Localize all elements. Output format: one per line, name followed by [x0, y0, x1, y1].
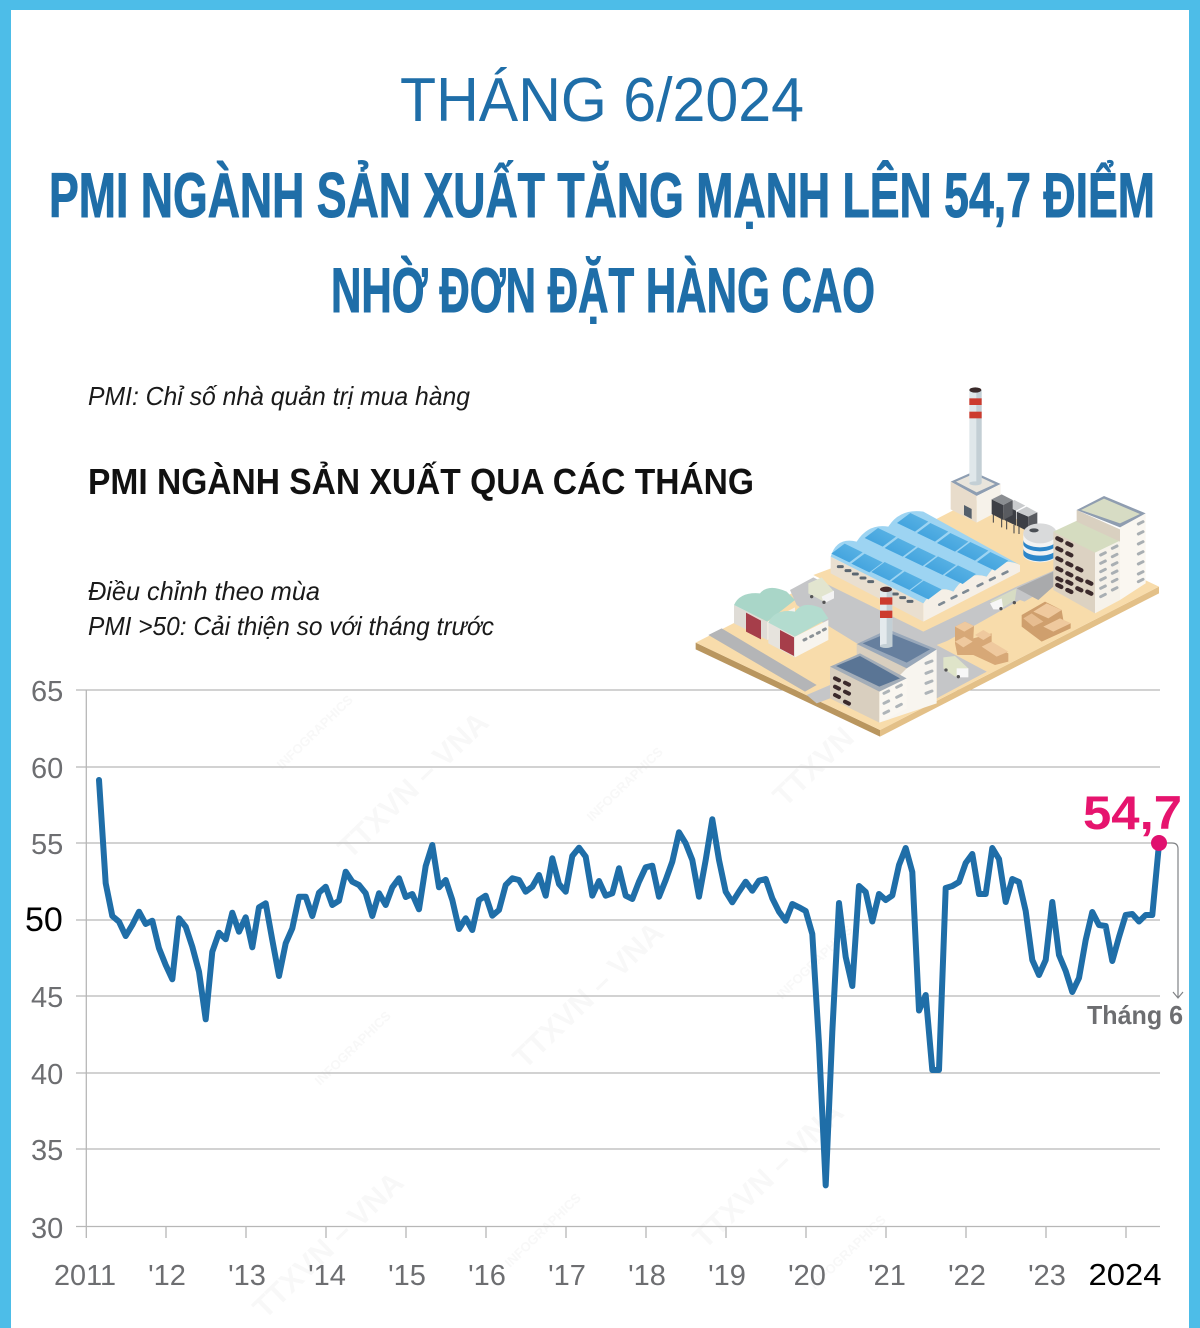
main warehouse — [813, 511, 1033, 630]
x axis labels: '22 — [948, 1260, 986, 1292]
title block: NHỜ ĐƠN ĐẶT HÀNG CAO — [331, 256, 875, 326]
y axis labels: 60 — [31, 753, 63, 785]
callout value: 54,7 — [1083, 786, 1182, 839]
PMI definition note: PMI: Chỉ số nhà quản trị mua hàng — [88, 381, 471, 411]
x axis labels: '20 — [788, 1260, 826, 1292]
y axis labels: 45 — [31, 982, 63, 1014]
x axis labels: 2024 — [1088, 1257, 1162, 1292]
cooling units — [992, 494, 1037, 534]
y axis labels — [25, 676, 63, 1245]
y axis labels: 50 — [25, 901, 63, 939]
rear chimney and boiler house — [951, 387, 1001, 523]
x axis labels: '21 — [868, 1260, 906, 1292]
highlight point — [1151, 835, 1167, 851]
chart heading: PMI NGÀNH SẢN XUẤT QUA CÁC THÁNG — [88, 461, 754, 502]
x axis labels: '16 — [468, 1260, 506, 1292]
x axis labels: '23 — [1028, 1260, 1066, 1292]
x axis labels: '15 — [388, 1260, 426, 1292]
watermarks: INFOGRAPHICS — [774, 922, 856, 1002]
y axis labels: 35 — [31, 1135, 63, 1167]
tall office building — [1053, 496, 1146, 613]
watermarks: INFOGRAPHICS — [807, 1212, 889, 1292]
yards — [730, 600, 1082, 692]
x axis labels: '19 — [708, 1260, 746, 1292]
chart notes: PMI >50: Cải thiện so với tháng trước — [88, 611, 494, 641]
icon: isometric factory — [696, 387, 1159, 737]
platform — [696, 499, 1159, 737]
watermarks: TTXVN — [767, 721, 861, 813]
x axis labels: '12 — [148, 1260, 186, 1292]
watermarks: INFOGRAPHICS — [502, 1190, 584, 1270]
x axis labels: '14 — [308, 1260, 346, 1292]
watermarks: INFOGRAPHICS — [312, 1008, 394, 1088]
y axis labels: 40 — [31, 1059, 63, 1091]
y axis labels: 30 — [31, 1213, 63, 1245]
y axis labels: 55 — [31, 829, 63, 861]
chart gridlines and axes — [76, 690, 1160, 1238]
x axis labels: '18 — [628, 1260, 666, 1292]
roads — [790, 570, 1055, 703]
watermarks: TTXVN – VNA — [687, 1096, 850, 1255]
stacked boxes — [955, 602, 1071, 665]
front-left road strip — [708, 628, 817, 692]
callout month label: Tháng 6 — [1087, 1000, 1183, 1030]
PMI line series — [99, 780, 1159, 1185]
x axis labels: '17 — [548, 1260, 586, 1292]
green sheds — [734, 588, 828, 657]
front chimney building — [830, 587, 937, 723]
callout arrow to month — [1162, 843, 1183, 998]
watermarks: TTXVN – VNA — [247, 1166, 410, 1325]
x axis labels — [54, 1257, 1162, 1292]
watermarks: TTXVN – VNA — [332, 706, 495, 865]
x axis labels: 2011 — [54, 1260, 116, 1292]
x axis labels: '13 — [228, 1260, 266, 1292]
trucks — [808, 577, 1017, 678]
y axis labels: 65 — [31, 676, 63, 708]
round tank — [1023, 523, 1057, 562]
chart notes: Điều chỉnh theo mùa — [88, 576, 320, 606]
title block: THÁNG 6/2024 — [400, 66, 804, 135]
watermarks: INFOGRAPHICS — [274, 692, 356, 772]
watermarks: TTXVN – VNA — [507, 916, 670, 1075]
watermarks — [247, 692, 889, 1325]
title block — [49, 66, 1155, 326]
watermarks: INFOGRAPHICS — [584, 744, 666, 824]
chart notes — [88, 576, 494, 641]
